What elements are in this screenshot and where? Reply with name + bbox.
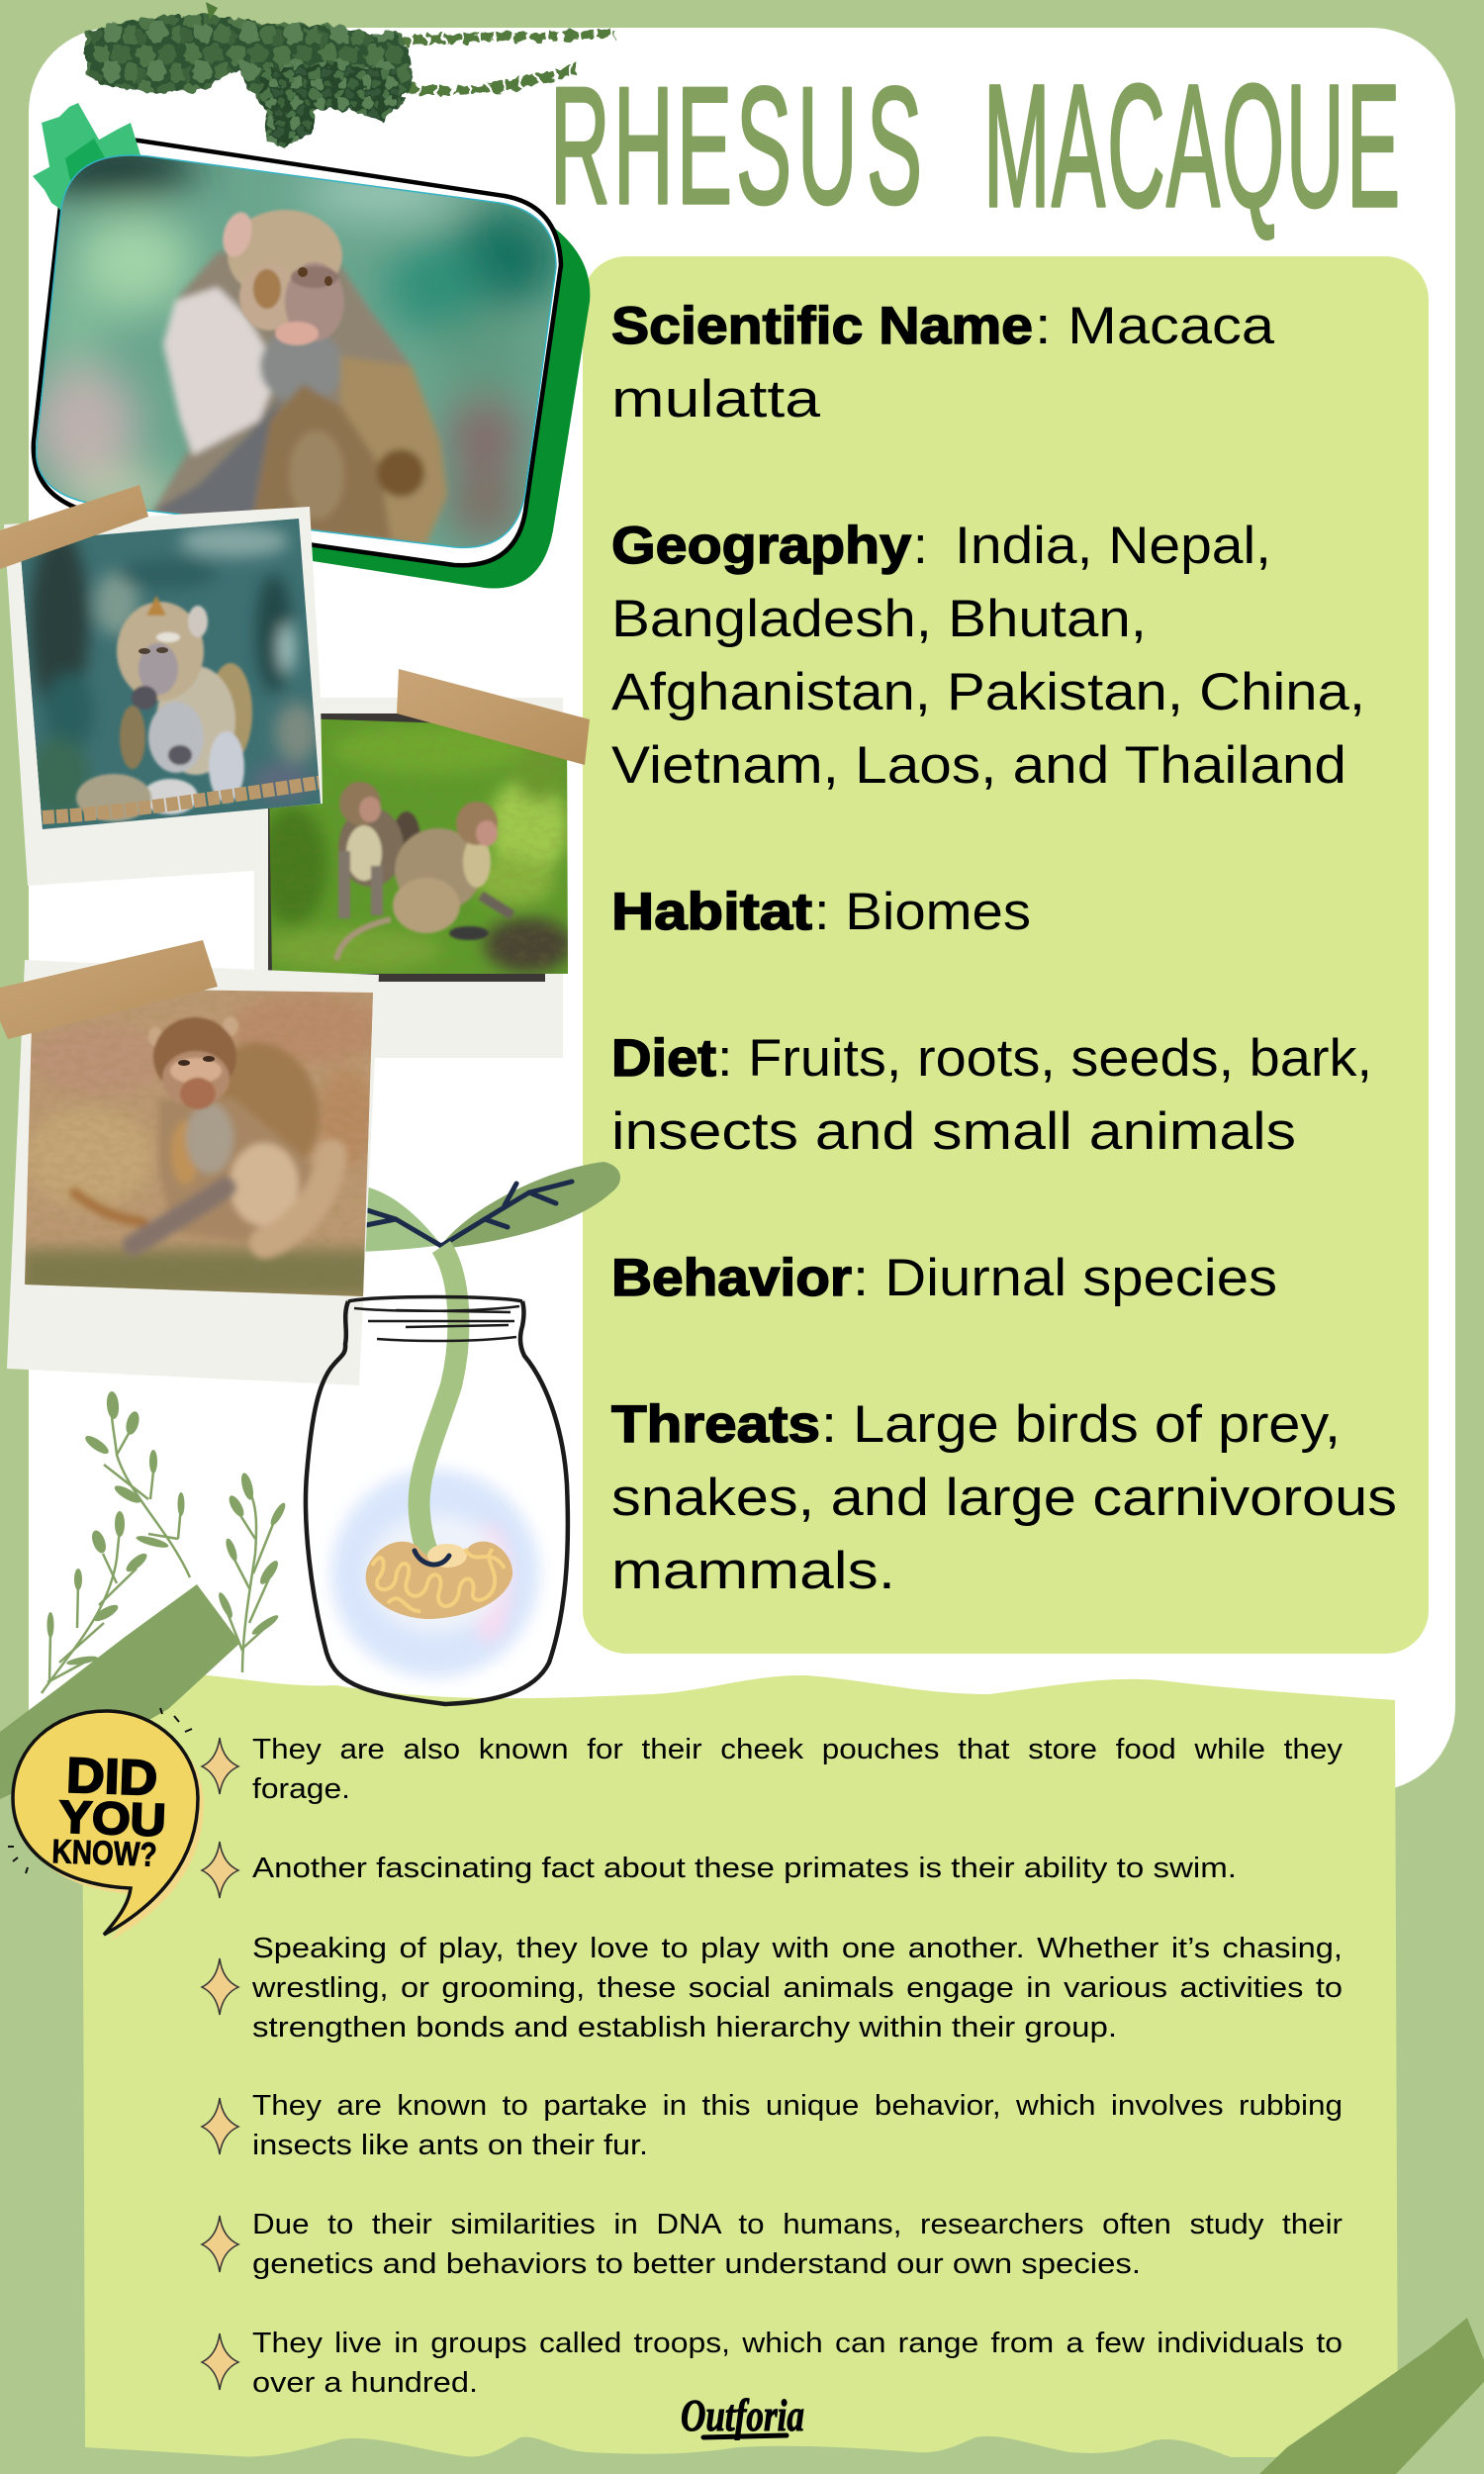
torn paper strip behind callout — [0, 1584, 240, 1799]
fact text: Threats — [611, 1395, 820, 1454]
plant: sprout leaves — [356, 1162, 620, 1252]
fact text: Habitat — [611, 883, 812, 941]
bullet text: Due to their similarities in DNA to humans, researchers often study their — [252, 2209, 1344, 2240]
green tape — [33, 103, 141, 210]
callout: did you know bubble: YOU — [58, 1790, 167, 1846]
sprigs of leaves — [42, 1391, 288, 1693]
black outline card — [34, 140, 561, 565]
bullet text: genetics and behaviors to better understand our own species. — [252, 2248, 1141, 2280]
fact text: : — [913, 517, 928, 575]
bullet text: insects like ants on their fur. — [252, 2130, 648, 2161]
jar rim — [348, 1296, 522, 1341]
fact text: : Biomes — [814, 883, 1031, 941]
bullet text: forage. — [252, 1773, 350, 1805]
title — [550, 49, 1400, 244]
monkey photo — [37, 156, 556, 547]
panel: main photo — [0, 103, 594, 588]
callout: did you know bubble — [8, 1708, 204, 1941]
bullet text: over a hundred. — [252, 2367, 478, 2399]
monkey body silhouette — [152, 249, 412, 540]
jar with seedling — [306, 1247, 568, 1704]
stem — [418, 1247, 458, 1569]
decorative torn strip bottom right — [1259, 2318, 1484, 2474]
bullet text: strengthen bonds and establish hierarchy within their group. — [252, 2012, 1117, 2044]
bullet text: Speaking of play, they love to play with one another. Whether it’s chasing, — [252, 1933, 1343, 1964]
panel: did you know facts — [82, 1675, 1398, 2457]
panel: white card — [29, 28, 1455, 1791]
fact text — [611, 297, 1397, 1600]
polaroid photo: monkey on dry grass — [7, 960, 386, 1385]
fact text: mammals. — [611, 1542, 895, 1600]
polaroid frame: two monkeys — [254, 698, 574, 1058]
vine foliage — [86, 2, 615, 146]
green backing shape — [297, 228, 590, 588]
fact text: mulatta — [611, 370, 821, 428]
fact text: India, Nepal, — [955, 517, 1271, 575]
bullet text — [251, 1734, 1344, 2399]
fact text: Afghanistan, Pakistan, China, — [611, 663, 1365, 721]
fact text: snakes, and large carnivorous — [611, 1469, 1397, 1527]
fact text: Vietnam, Laos, and Thailand — [611, 736, 1346, 795]
bullet text: They are known to partake in this unique behavior, which involves rubbing — [252, 2090, 1343, 2122]
polaroid photo: monkey on rope — [0, 505, 336, 886]
fact text: Behavior — [611, 1249, 852, 1307]
logo: Outforia: Outforia — [681, 2390, 804, 2440]
fact text: : Large birds of prey, — [821, 1395, 1341, 1454]
fact text: Diet — [611, 1029, 716, 1088]
jar glow — [331, 1470, 539, 1677]
fact text: Scientific Name — [611, 297, 1033, 355]
panel: facts — [583, 256, 1429, 1654]
bullet text: They live in groups called troops, which can range from a few individuals to — [252, 2328, 1343, 2359]
callout: did you know bubble: DID — [65, 1748, 158, 1806]
bullet text: wrestling, or grooming, these social animals engage in various activities to — [251, 1972, 1343, 2004]
callout: did you know bubble: KNOW? — [51, 1833, 157, 1874]
star bullets — [202, 1738, 238, 2390]
bullet text: They are also known for their cheek pouches that store food while they — [252, 1734, 1344, 1765]
fact text: : Fruits, roots, seeds, bark, — [717, 1029, 1372, 1088]
jar outline — [306, 1301, 568, 1704]
fact text: Bangladesh, Bhutan, — [611, 590, 1147, 648]
bullet text: Another fascinating fact about these primates is their ability to swim. — [252, 1853, 1237, 1884]
fact text: Geography — [611, 517, 912, 575]
fact text: : Macaca — [1035, 297, 1275, 355]
brown tape strips — [0, 485, 590, 1039]
fact text: : Diurnal species — [853, 1249, 1277, 1307]
title: RHESUS — [550, 53, 922, 239]
title: MACAQUE — [983, 49, 1400, 244]
fact text: insects and small animals — [611, 1102, 1296, 1161]
bean — [366, 1542, 512, 1619]
